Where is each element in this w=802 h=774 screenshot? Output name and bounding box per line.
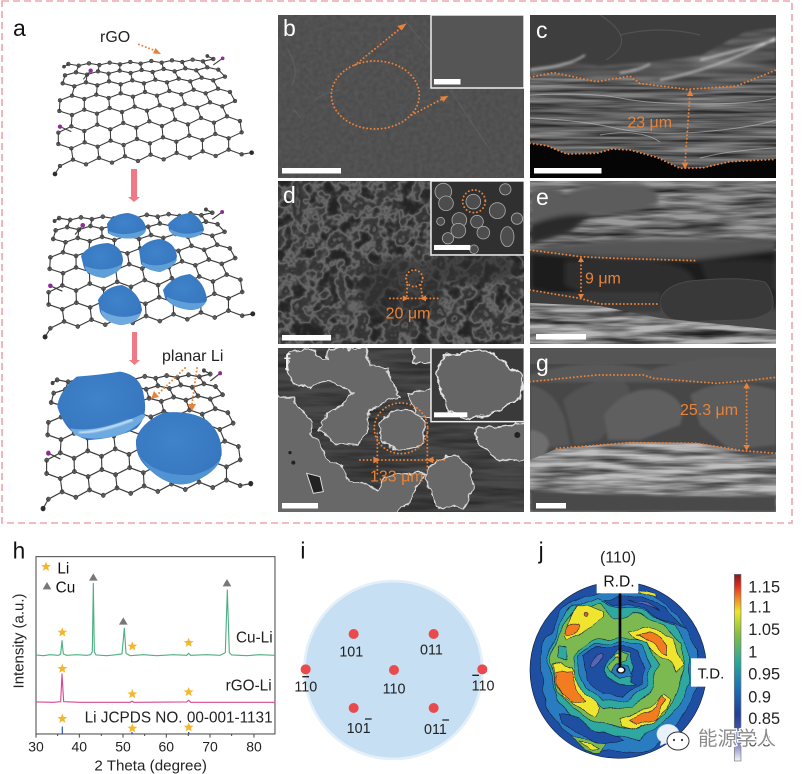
- rGO film layers: [530, 440, 776, 512]
- colour bar labels: 1.1: [748, 598, 771, 616]
- scale bar f: [282, 503, 318, 508]
- colour bar labels: [748, 578, 780, 751]
- scale bar g: [536, 503, 566, 508]
- arrow: rGO pointer: [139, 44, 161, 54]
- scale bar b: [282, 168, 341, 174]
- lower-right high region: [621, 694, 672, 730]
- pole labels: 011: [424, 722, 447, 738]
- watermark: [657, 724, 776, 750]
- upper-left high region: [561, 604, 603, 642]
- center hole: [616, 666, 626, 674]
- panel j: pole figure: [527, 537, 780, 762]
- R.D. label box: [597, 573, 638, 593]
- Li seed discs: [81, 213, 207, 325]
- pole labels: 101: [347, 721, 371, 737]
- pole labels: 110: [472, 678, 495, 694]
- x axis tick labels: 30: [28, 738, 44, 754]
- panel a: rGO to planar Li schematic: [13, 15, 255, 511]
- panel c: rGO cross-section: [530, 15, 776, 178]
- pole labels: 011: [420, 643, 443, 659]
- T.D. label box: [691, 658, 727, 687]
- colour bar labels: 0.8: [748, 733, 771, 751]
- x axis tick labels: 40: [72, 738, 87, 754]
- planar Li label: planar Li: [162, 348, 223, 365]
- overlay: 25.3 µm thickness: 25.3 μm: [680, 402, 738, 419]
- inset d with round seeds: [431, 181, 524, 255]
- stereographic circle: [304, 581, 482, 759]
- lower-left low band: [562, 715, 625, 743]
- graphene sheet 1: [53, 54, 254, 176]
- inset b: [431, 15, 524, 88]
- Cu-Li pattern: [36, 583, 275, 656]
- overlay: thickness 23 µm: [530, 70, 776, 169]
- panel b: flat SEM: [278, 15, 524, 178]
- icon: chat bubbles: [657, 724, 689, 750]
- pole dots: [301, 629, 487, 713]
- label d: d: [283, 182, 296, 208]
- rGO-Li pattern: [36, 674, 275, 702]
- central low region: [573, 636, 658, 708]
- label f: f: [284, 349, 291, 375]
- label e: e: [536, 184, 549, 210]
- reference line: [62, 727, 189, 734]
- T.D. label box: T.D.: [698, 665, 724, 682]
- series labels: Cu-Li: [236, 629, 273, 646]
- panel f: large Li discs SEM top view: [273, 345, 530, 517]
- dashed border: top section frame: [2, 1, 792, 523]
- peak stars: [57, 627, 194, 733]
- axes frame: [36, 557, 275, 734]
- pole labels: [294, 643, 495, 738]
- R.D. axis line: [616, 593, 624, 667]
- watermark text: 能源学人: [698, 728, 776, 750]
- label h: h: [13, 537, 25, 563]
- pole labels: 101: [339, 644, 363, 660]
- bright upper sheets: [530, 25, 776, 90]
- Li domes: [530, 364, 776, 460]
- label c: c: [536, 17, 548, 43]
- panel h: XRD chart: [10, 537, 275, 774]
- panel f: large Li discs SEM top view: 133 μm: [370, 469, 424, 486]
- x axis tick labels: 60: [159, 738, 174, 754]
- R.D. label box: R.D.: [603, 574, 635, 591]
- overlay: 20 µm measure: [386, 270, 438, 322]
- arrows: planar Li pointers: [151, 368, 197, 411]
- layered film: [530, 68, 776, 173]
- label b: b: [283, 15, 296, 41]
- label a: a: [13, 15, 26, 41]
- rGO substrate layers: [530, 300, 776, 344]
- scale bar d: [282, 335, 331, 340]
- colour bar labels: 1.15: [748, 578, 780, 596]
- capsule seed: [660, 279, 773, 322]
- graphene sheet 2: [43, 208, 255, 339]
- planar Li large discs: [57, 372, 222, 484]
- top-right low band: [603, 594, 687, 630]
- overlay: 9 µm thickness: 9 μm: [585, 270, 621, 287]
- x axis tick labels: 80: [246, 738, 262, 754]
- overbars: [302, 675, 479, 720]
- overlay: thickness 23 µm: 23 μm: [627, 115, 672, 132]
- colour bar labels: 1.05: [748, 621, 780, 639]
- upper-right high region: [630, 627, 683, 673]
- x axis tick labels: [28, 738, 262, 754]
- series labels: rGO-Li: [226, 678, 272, 695]
- y axis title: Intensity (a.u.): [10, 594, 27, 688]
- colour bar labels: 0.85: [748, 710, 780, 728]
- series labels: Li JCPDS NO. 00-001-1131: [85, 710, 273, 727]
- rGO label: rGO: [100, 29, 130, 46]
- label j: j: [538, 537, 544, 563]
- legend: Cu: [56, 579, 75, 596]
- x axis tick labels: 50: [115, 738, 131, 754]
- overlay: magnification circle and arrows: [331, 23, 448, 129]
- label g: g: [536, 350, 549, 376]
- legend: [41, 561, 75, 596]
- inset f: [431, 348, 524, 422]
- overlay: 25.3 µm thickness: [530, 375, 776, 453]
- pole labels: 110: [294, 679, 317, 695]
- series labels: [85, 629, 273, 727]
- contour disc: [527, 578, 710, 762]
- overlay: 133 µm measure: [374, 403, 428, 454]
- overlay: 9 µm thickness: [530, 250, 697, 304]
- left high region: [553, 662, 598, 715]
- scale bar c: [534, 168, 602, 174]
- peak triangles: [89, 573, 231, 625]
- pole labels: 110: [383, 682, 406, 698]
- x axis ticks: [36, 734, 254, 738]
- arrow: sheet to Li seeds: [128, 169, 140, 202]
- large Li flakes: [273, 345, 530, 517]
- scale bar e: [536, 334, 586, 340]
- black substrate: [530, 143, 776, 178]
- title (110): (110): [600, 549, 636, 566]
- colour bar labels: 0.95: [748, 665, 780, 683]
- colour bar labels: 0.9: [748, 688, 771, 706]
- colour bar: [734, 574, 741, 761]
- panel i: pole schematic: [294, 537, 495, 759]
- legend: Li: [57, 561, 69, 578]
- graphene sheet 3: [41, 368, 253, 511]
- label i: i: [300, 537, 305, 563]
- overlay: 20 µm measure: 20 μm: [386, 305, 430, 322]
- panel d: Li seeds SEM top view: [278, 181, 524, 344]
- x axis tick labels: 70: [202, 738, 218, 754]
- panel e: seeds cross-section: [530, 181, 776, 344]
- colour bar labels: 1: [748, 643, 757, 661]
- panel g: large Li cross-section: [530, 348, 776, 512]
- arrow: seeds to planar Li: [129, 332, 140, 365]
